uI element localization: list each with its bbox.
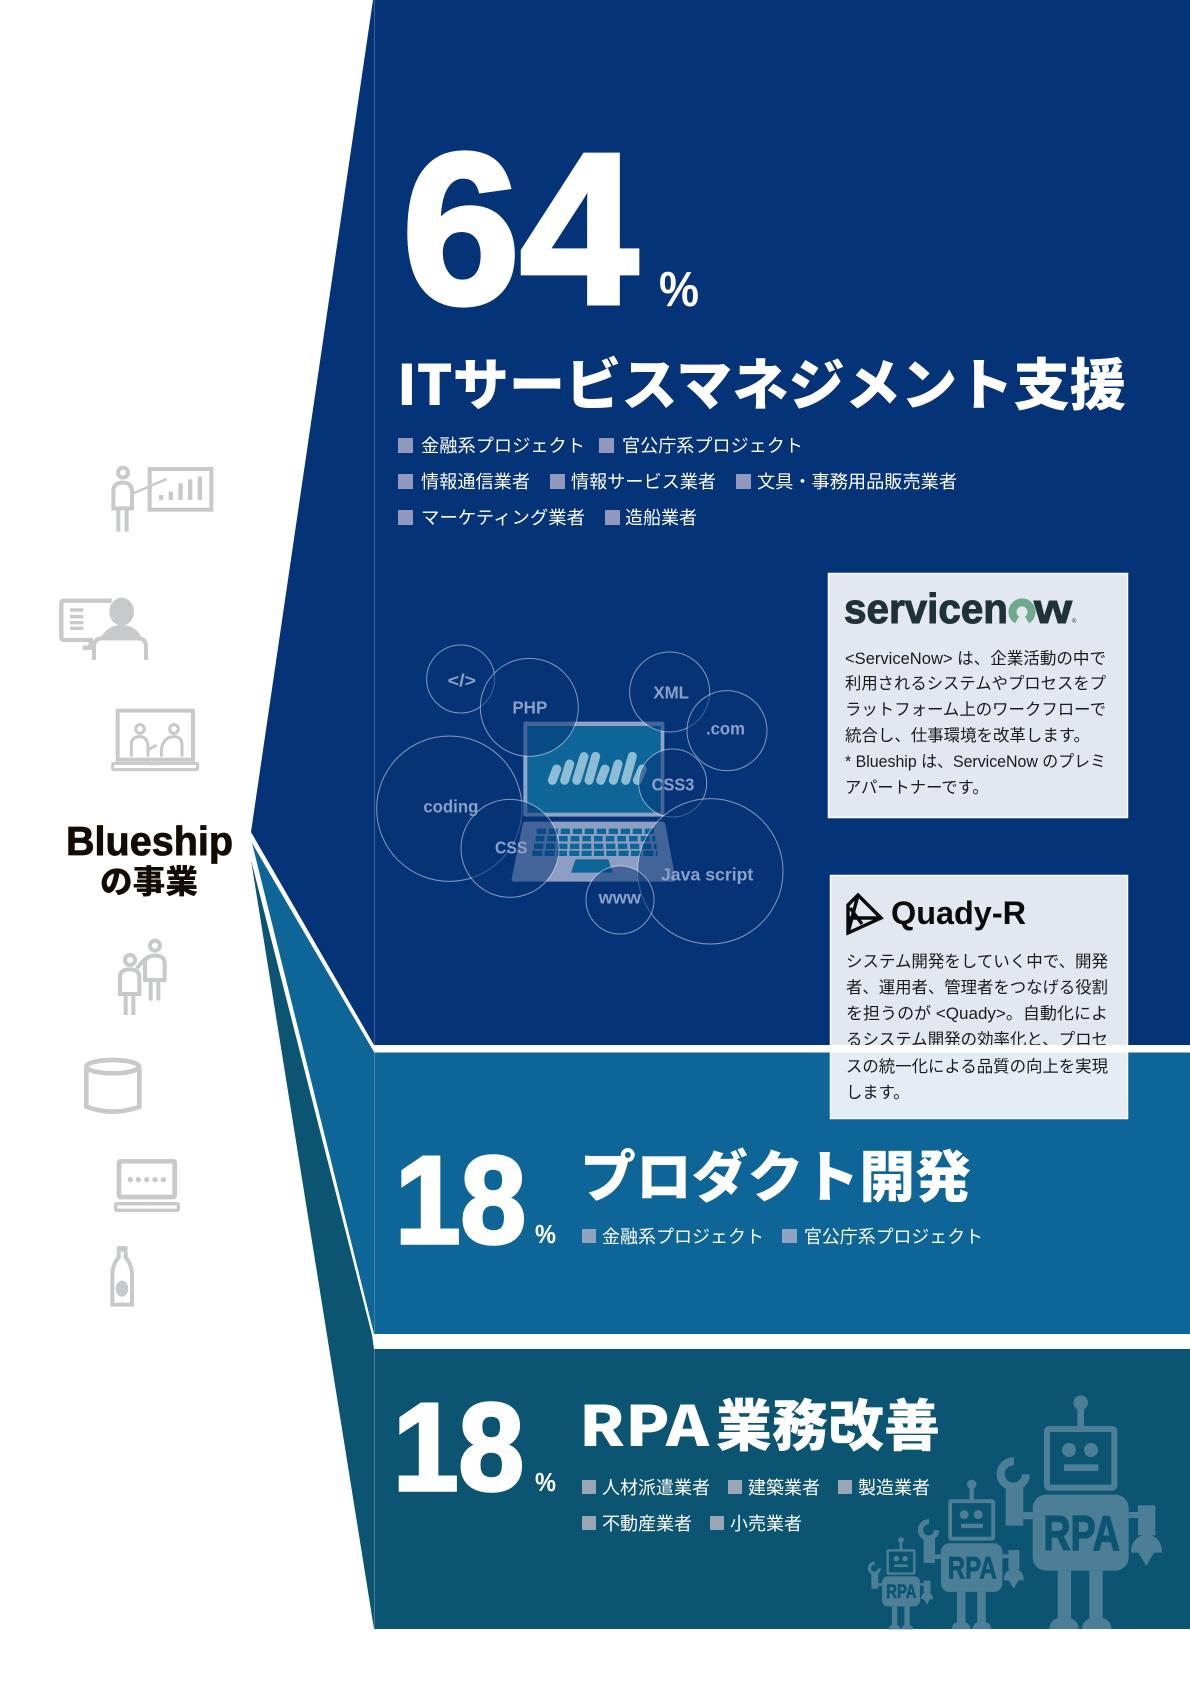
body text: Quady: るシステム開発の効率化と、プロセ [846, 1031, 1108, 1049]
bubble labels: PHP [512, 697, 547, 717]
heading: 18 percent product development: % [535, 1219, 556, 1249]
bubble labels: XML [653, 682, 689, 702]
panel: product development background [252, 843, 1190, 1334]
logo: servicenow: ® [1072, 618, 1077, 625]
heading: 64 percent: % [659, 263, 699, 317]
heading: 18 percent RPA: % [535, 1467, 556, 1497]
bubble labels: CSS3 [652, 775, 695, 795]
list: IT service industries: 造船業者 [625, 504, 697, 530]
body text: ServiceNow: アパートナーです。 [845, 779, 989, 797]
bubble labels [423, 671, 754, 907]
bubble labels: Java script [661, 864, 754, 884]
heading: 18 percent RPA: 18 [393, 1379, 524, 1517]
list: RPA industries: 建築業者 [748, 1474, 820, 1500]
list: IT service industries: 官公庁系プロジェクト [622, 432, 803, 458]
list: IT service industries: 文具・事務用品販売業者 [757, 468, 957, 494]
body text: Quady [846, 953, 1108, 1102]
heading: RPA business improvement [579, 1382, 940, 1463]
body text: Quady: スの統一化による品質の向上を実現 [846, 1058, 1108, 1076]
laptop screen [523, 722, 664, 817]
heading: RPA business improvement: RPA [579, 1382, 710, 1463]
icon: presenter with chart [113, 468, 211, 532]
bubble labels: coding [423, 797, 478, 817]
body text: Quady: を担うのが <Quady>。自動化によ [846, 1005, 1108, 1023]
list: product development industries: 金融系プロジェクト [602, 1223, 764, 1249]
icon: large RPA robot [1001, 1395, 1162, 1629]
icon: laptop with dots [116, 1161, 178, 1210]
icon: two people on laptop screen [113, 711, 198, 770]
body text: ServiceNow: 利用されるシステムやプロセスをプ [845, 675, 1107, 693]
bubble labels: </> [448, 671, 476, 691]
bubble labels: www [598, 887, 642, 907]
body text: ServiceNow: * Blueship は、ServiceNow のプレミ [845, 753, 1106, 771]
list: RPA industries [582, 1474, 930, 1536]
body text: ServiceNow: 統合し、仕事環境を改革します。 [845, 727, 1090, 745]
bubble labels: CSS [495, 837, 527, 857]
list: IT service industries: 情報サービス業者 [571, 468, 716, 494]
icon: database cylinder [86, 1060, 139, 1112]
list: RPA industries: 製造業者 [858, 1474, 930, 1500]
body text: Quady: します。 [846, 1084, 910, 1102]
icon: large RPA robot: RPA [1043, 1506, 1120, 1561]
heading: product development: プロダクト開発 [580, 1133, 971, 1214]
list: IT service industries: 情報通信業者 [421, 468, 530, 494]
list: RPA industries: 人材派遣業者 [602, 1474, 710, 1500]
body text: ServiceNow [845, 650, 1107, 797]
logo: Quady-R: Quady-R [891, 895, 1026, 931]
illustration: laptop with web technology bubbles [377, 645, 783, 944]
list: product development industries: 官公庁系プロジェクト [804, 1223, 983, 1249]
bubbles [377, 645, 783, 944]
icon: person at monitor [61, 598, 146, 660]
panel: IT service management background [251, 0, 1190, 1045]
body text: Quady: 者、運用者、管理者をつなげる役割 [846, 979, 1108, 997]
bubble labels: .com [706, 718, 745, 738]
icon: two people [120, 941, 165, 1015]
icon: medium RPA robot [920, 1480, 1024, 1629]
logo: servicenow: w [1033, 585, 1072, 632]
list: IT service industries [398, 432, 957, 530]
body text: Quady: システム開発をしていく中で、開発 [846, 953, 1108, 971]
list: RPA industries: 不動産業者 [602, 1510, 692, 1536]
logo: servicenow: servicen [844, 585, 1008, 632]
icon: small RPA robot [869, 1537, 933, 1629]
list: IT service industries: 金融系プロジェクト [421, 432, 585, 458]
title: の事業: の事業 [100, 856, 198, 903]
panel: ServiceNow card [828, 574, 1128, 818]
body text: ServiceNow: <ServiceNow> は、企業活動の中で [845, 650, 1106, 668]
heading: IT service management: ITサービスマネジメント支援 [397, 341, 1126, 422]
list: IT service industries: マーケティング業者 [421, 504, 585, 530]
heading: RPA business improvement: 業務改善 [716, 1382, 940, 1463]
title: Blueship: Blueship [66, 818, 233, 864]
laptop keyboard base [512, 822, 675, 882]
list: product development industries [582, 1223, 983, 1249]
icon: medium RPA robot: RPA [948, 1550, 997, 1586]
list: RPA industries: 小売業者 [730, 1510, 802, 1536]
panel: RPA background [251, 860, 1190, 1629]
heading: 64 percent: 64 [402, 108, 638, 349]
icon: small RPA robot: RPA [886, 1581, 917, 1603]
panel: Quady-R card [830, 876, 1128, 1118]
heading: 18 percent product development: 18 [395, 1132, 526, 1270]
icon: bottle [112, 1246, 132, 1305]
body text: ServiceNow: ラットフォーム上のワークフローで [845, 701, 1106, 719]
